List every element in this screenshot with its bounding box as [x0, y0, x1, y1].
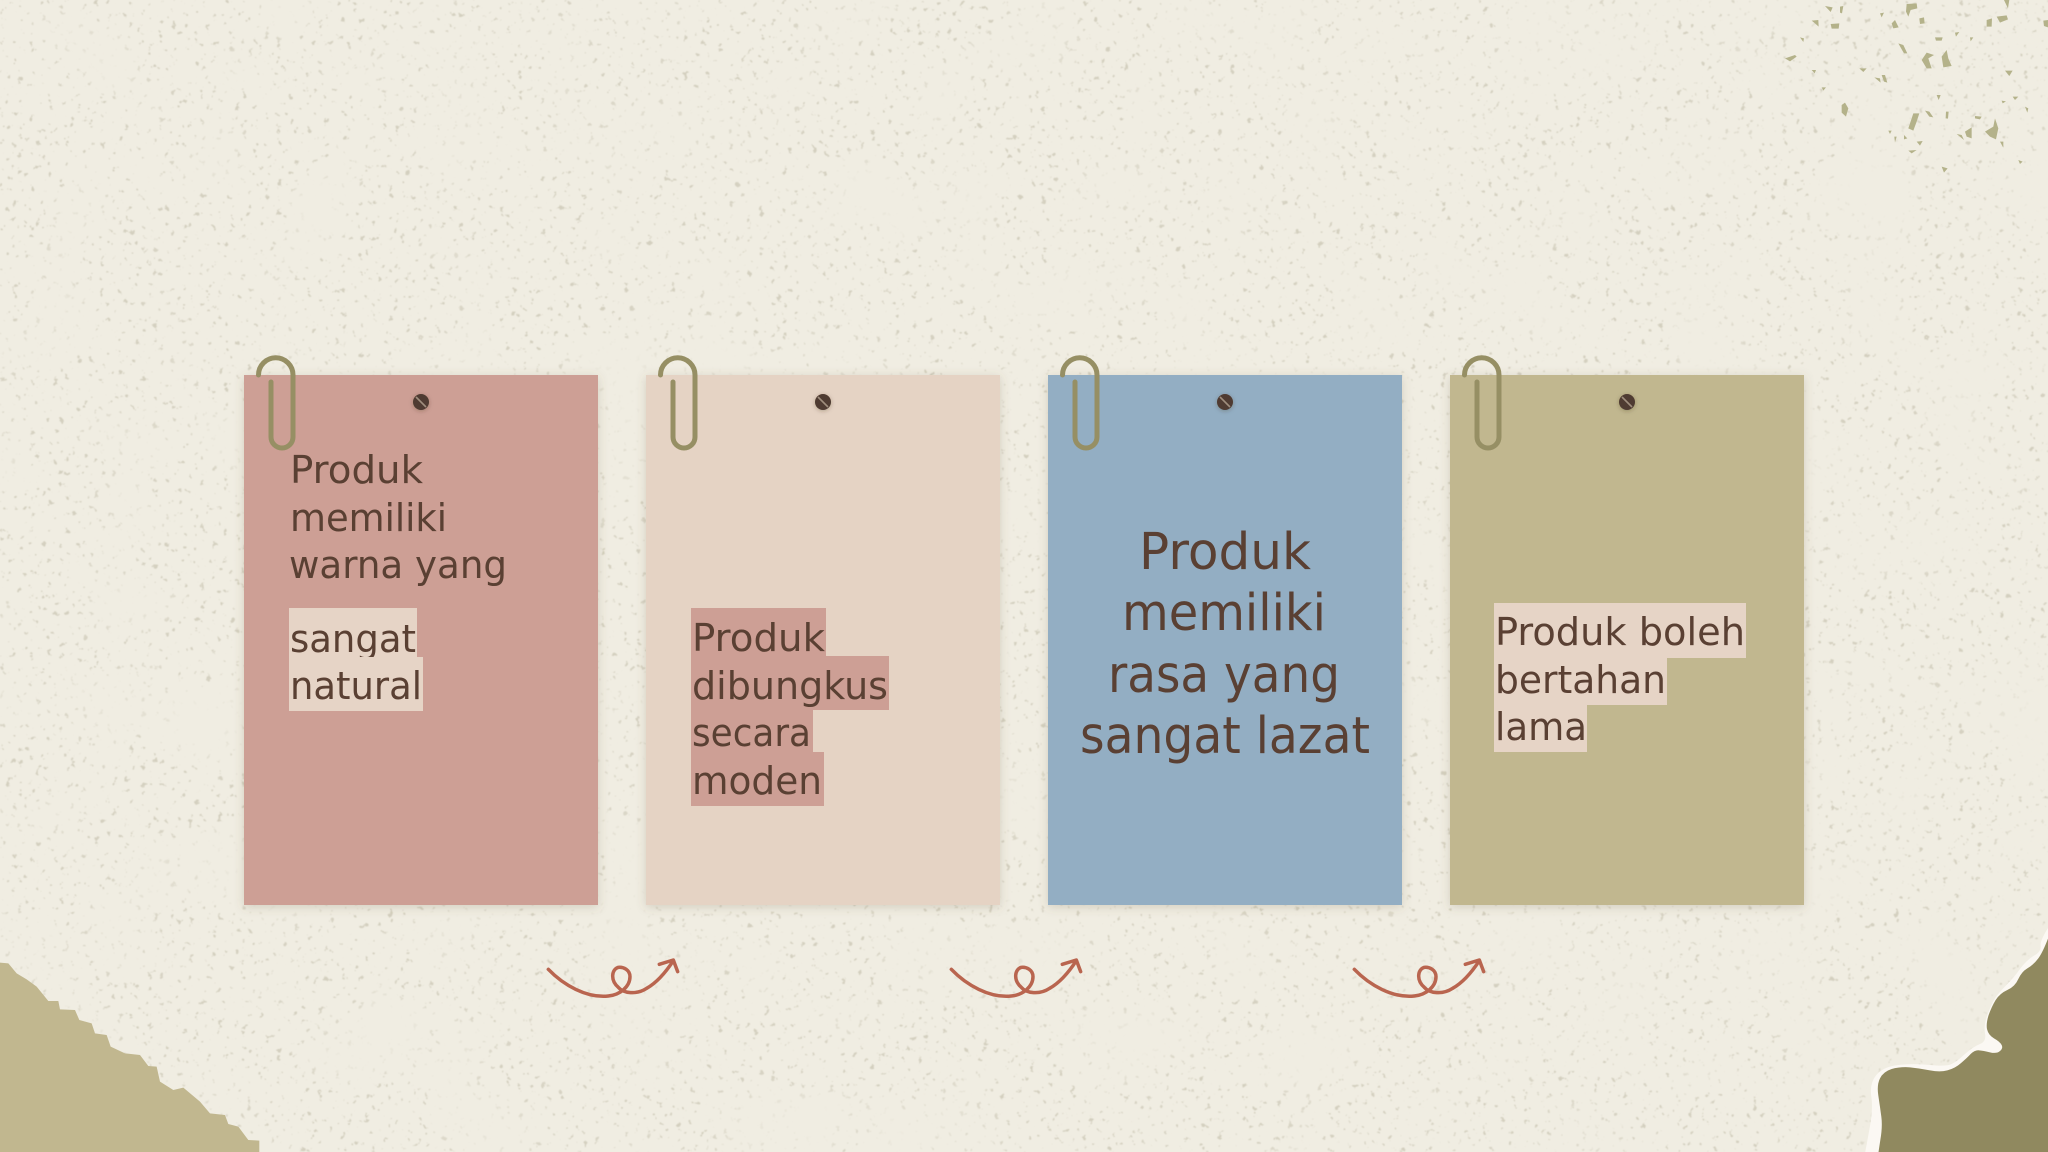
card paper — [244, 375, 598, 905]
icon: paperclip — [1062, 358, 1097, 448]
text block: Produk — [290, 448, 423, 492]
torn paper corner: bottom left — [0, 963, 259, 1152]
card paper — [1450, 375, 1804, 905]
text block: Produk — [692, 616, 825, 660]
text block: Produk — [1139, 522, 1312, 581]
icon: paperclip — [1464, 358, 1499, 448]
text block: lama — [1495, 705, 1587, 749]
text block: warna yang — [289, 543, 507, 587]
text block: rasa yang — [1108, 645, 1340, 704]
text block — [289, 448, 507, 711]
torn corner fill — [1878, 933, 2048, 1152]
card paper — [1048, 375, 1402, 905]
green speckles top right — [1785, 0, 2048, 173]
panel: card 3 delicious taste — [1048, 358, 1402, 905]
text block: bertahan — [1495, 658, 1666, 702]
icon: paperclip — [258, 358, 293, 448]
icon: paperclip — [660, 358, 695, 448]
panel: card 2 modern packaging — [646, 358, 1000, 905]
text block — [1494, 603, 1746, 752]
text block — [691, 608, 889, 806]
icon: pin — [815, 394, 831, 410]
text block: moden — [692, 759, 822, 803]
torn edge highlight — [1865, 925, 2048, 1152]
text block: sangat — [290, 617, 416, 661]
text block: dibungkus — [692, 664, 888, 708]
arrow: card 2 to card 3 — [951, 960, 1081, 996]
text block: memiliki — [1122, 583, 1326, 642]
arrow: card 1 to card 2 — [548, 960, 678, 996]
text block: Produk boleh — [1495, 610, 1745, 654]
text block: sangat lazat — [1080, 706, 1370, 765]
panel: card 1 natural colour — [244, 358, 598, 905]
panel: card 4 long lasting — [1450, 358, 1804, 905]
text block: secara — [692, 711, 811, 755]
icon: pin — [1217, 394, 1233, 410]
text block: memiliki — [290, 496, 447, 540]
text block — [1080, 522, 1370, 765]
arrow: card 3 to card 4 — [1354, 960, 1484, 996]
torn paper corner: bottom right — [1865, 925, 2048, 1152]
icon: pin — [1619, 394, 1635, 410]
text block: natural — [290, 664, 422, 708]
icon: pin — [413, 394, 429, 410]
card paper — [646, 375, 1000, 905]
